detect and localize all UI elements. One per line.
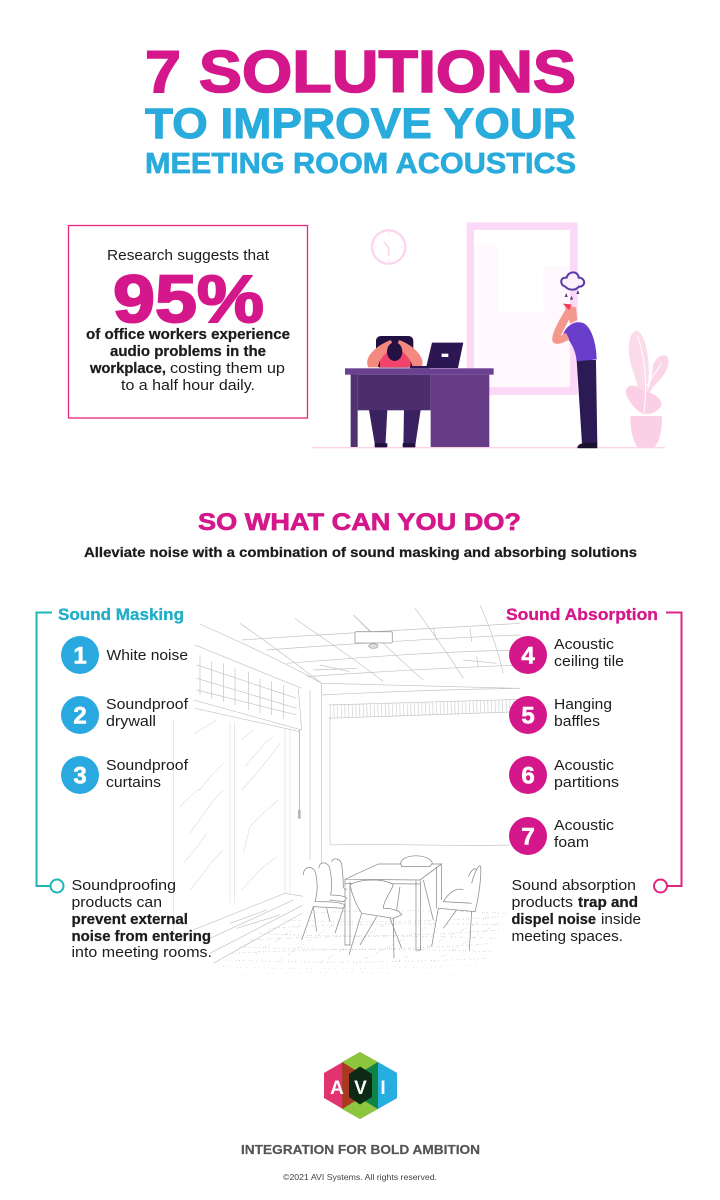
- description: into meeting rooms.: [72, 945, 212, 961]
- panel: statistic callout: to a half hour daily.: [121, 378, 255, 394]
- panel: statistic callout: Research suggests that: [107, 248, 269, 264]
- item 3: [61, 756, 189, 794]
- item 7: 7: [521, 824, 535, 850]
- chairs: [302, 856, 481, 958]
- item 6: [509, 756, 619, 794]
- seated worker: [367, 336, 423, 447]
- item 1: White noise: [106, 648, 188, 664]
- windowsill: [193, 893, 305, 963]
- laptop: [410, 343, 463, 368]
- title: 7 SOLUTIONS: [145, 39, 576, 105]
- item 3: curtains: [106, 775, 161, 791]
- item 1: [61, 636, 188, 674]
- heading: so what can you do: SO WHAT CAN YOU DO?: [198, 509, 521, 536]
- item 5: Hanging: [554, 697, 612, 713]
- illustration: meeting room sketch: [173, 605, 520, 983]
- item 6: 6: [521, 762, 535, 790]
- item 4: ceiling tile: [554, 654, 624, 670]
- illustration: stressed office workers: [312, 222, 669, 448]
- desk: [345, 368, 494, 447]
- panel: sound masking: [36, 606, 212, 961]
- item 1: 1: [73, 642, 87, 670]
- item 6: Acoustic: [554, 758, 614, 774]
- item 7: [509, 817, 614, 855]
- logo: AVI hexagon: I: [380, 1078, 386, 1099]
- panel: statistic callout: workplace,: [89, 361, 166, 377]
- item 2: Soundproof: [106, 697, 189, 713]
- item 4: [509, 636, 624, 674]
- title: TO IMPROVE YOUR: [145, 100, 576, 148]
- description: Sound absorption: [512, 878, 636, 894]
- panel: sound absorption: [506, 606, 682, 945]
- floor: [312, 447, 665, 448]
- description: dispel noise: [512, 912, 596, 928]
- logo: AVI hexagon: V: [354, 1078, 367, 1099]
- item 5: 5: [521, 702, 535, 730]
- logo: AVI hexagon: [324, 1052, 397, 1119]
- item 3: 3: [73, 762, 87, 790]
- title: MEETING ROOM ACOUSTICS: [145, 148, 576, 180]
- standing worker: [552, 304, 597, 448]
- clock: [372, 230, 405, 264]
- description: trap and: [578, 895, 638, 911]
- item 4: Acoustic: [554, 637, 614, 653]
- description: [512, 878, 641, 945]
- description: meeting spaces.: [512, 929, 623, 945]
- item 6: partitions: [554, 775, 619, 791]
- heading: Sound Absorption: [506, 606, 658, 624]
- plant: [626, 331, 669, 448]
- projector: [353, 615, 392, 648]
- logo: AVI hexagon: A: [330, 1078, 344, 1099]
- bracket line: [654, 612, 682, 892]
- description: Soundproofing: [72, 878, 176, 894]
- description: prevent external: [72, 912, 188, 928]
- description: [72, 878, 212, 961]
- icon: rain cloud: [561, 272, 584, 300]
- panel: statistic callout: costing them up: [170, 361, 285, 377]
- item 5: [509, 696, 612, 734]
- roller blind: [193, 645, 302, 819]
- item 5: baffles: [554, 714, 600, 730]
- bracket line: [36, 612, 64, 892]
- subheading: Alleviate noise with a combination of sound masking and absorbing solutions: [84, 545, 637, 560]
- wall and columns: [310, 690, 520, 863]
- item 2: [61, 696, 189, 734]
- item 2: 2: [73, 702, 87, 730]
- panel: statistic callout: audio problems in the: [110, 344, 266, 360]
- description: inside: [601, 912, 641, 928]
- tagline: INTEGRATION FOR BOLD AMBITION: [241, 1143, 480, 1157]
- heading: Sound Masking: [58, 606, 184, 624]
- panel: statistic callout: of office workers experience: [86, 327, 290, 343]
- windows: [173, 720, 290, 933]
- description: noise from entering: [72, 929, 211, 945]
- item 2: drywall: [106, 714, 156, 730]
- table: [345, 864, 442, 950]
- title: [145, 39, 576, 180]
- copyright: ©2021 AVI Systems. All rights reserved.: [283, 1172, 437, 1182]
- item 4: 4: [521, 642, 535, 670]
- description: products: [512, 895, 573, 911]
- door: [467, 222, 578, 395]
- ceiling: [200, 605, 520, 695]
- panel: statistic callout: [68, 226, 308, 418]
- item 7: foam: [554, 835, 589, 851]
- floor speckle: [223, 911, 507, 983]
- item 3: Soundproof: [106, 758, 189, 774]
- item 7: Acoustic: [554, 818, 614, 834]
- description: products can: [72, 895, 162, 911]
- big number: 95%: [113, 262, 264, 337]
